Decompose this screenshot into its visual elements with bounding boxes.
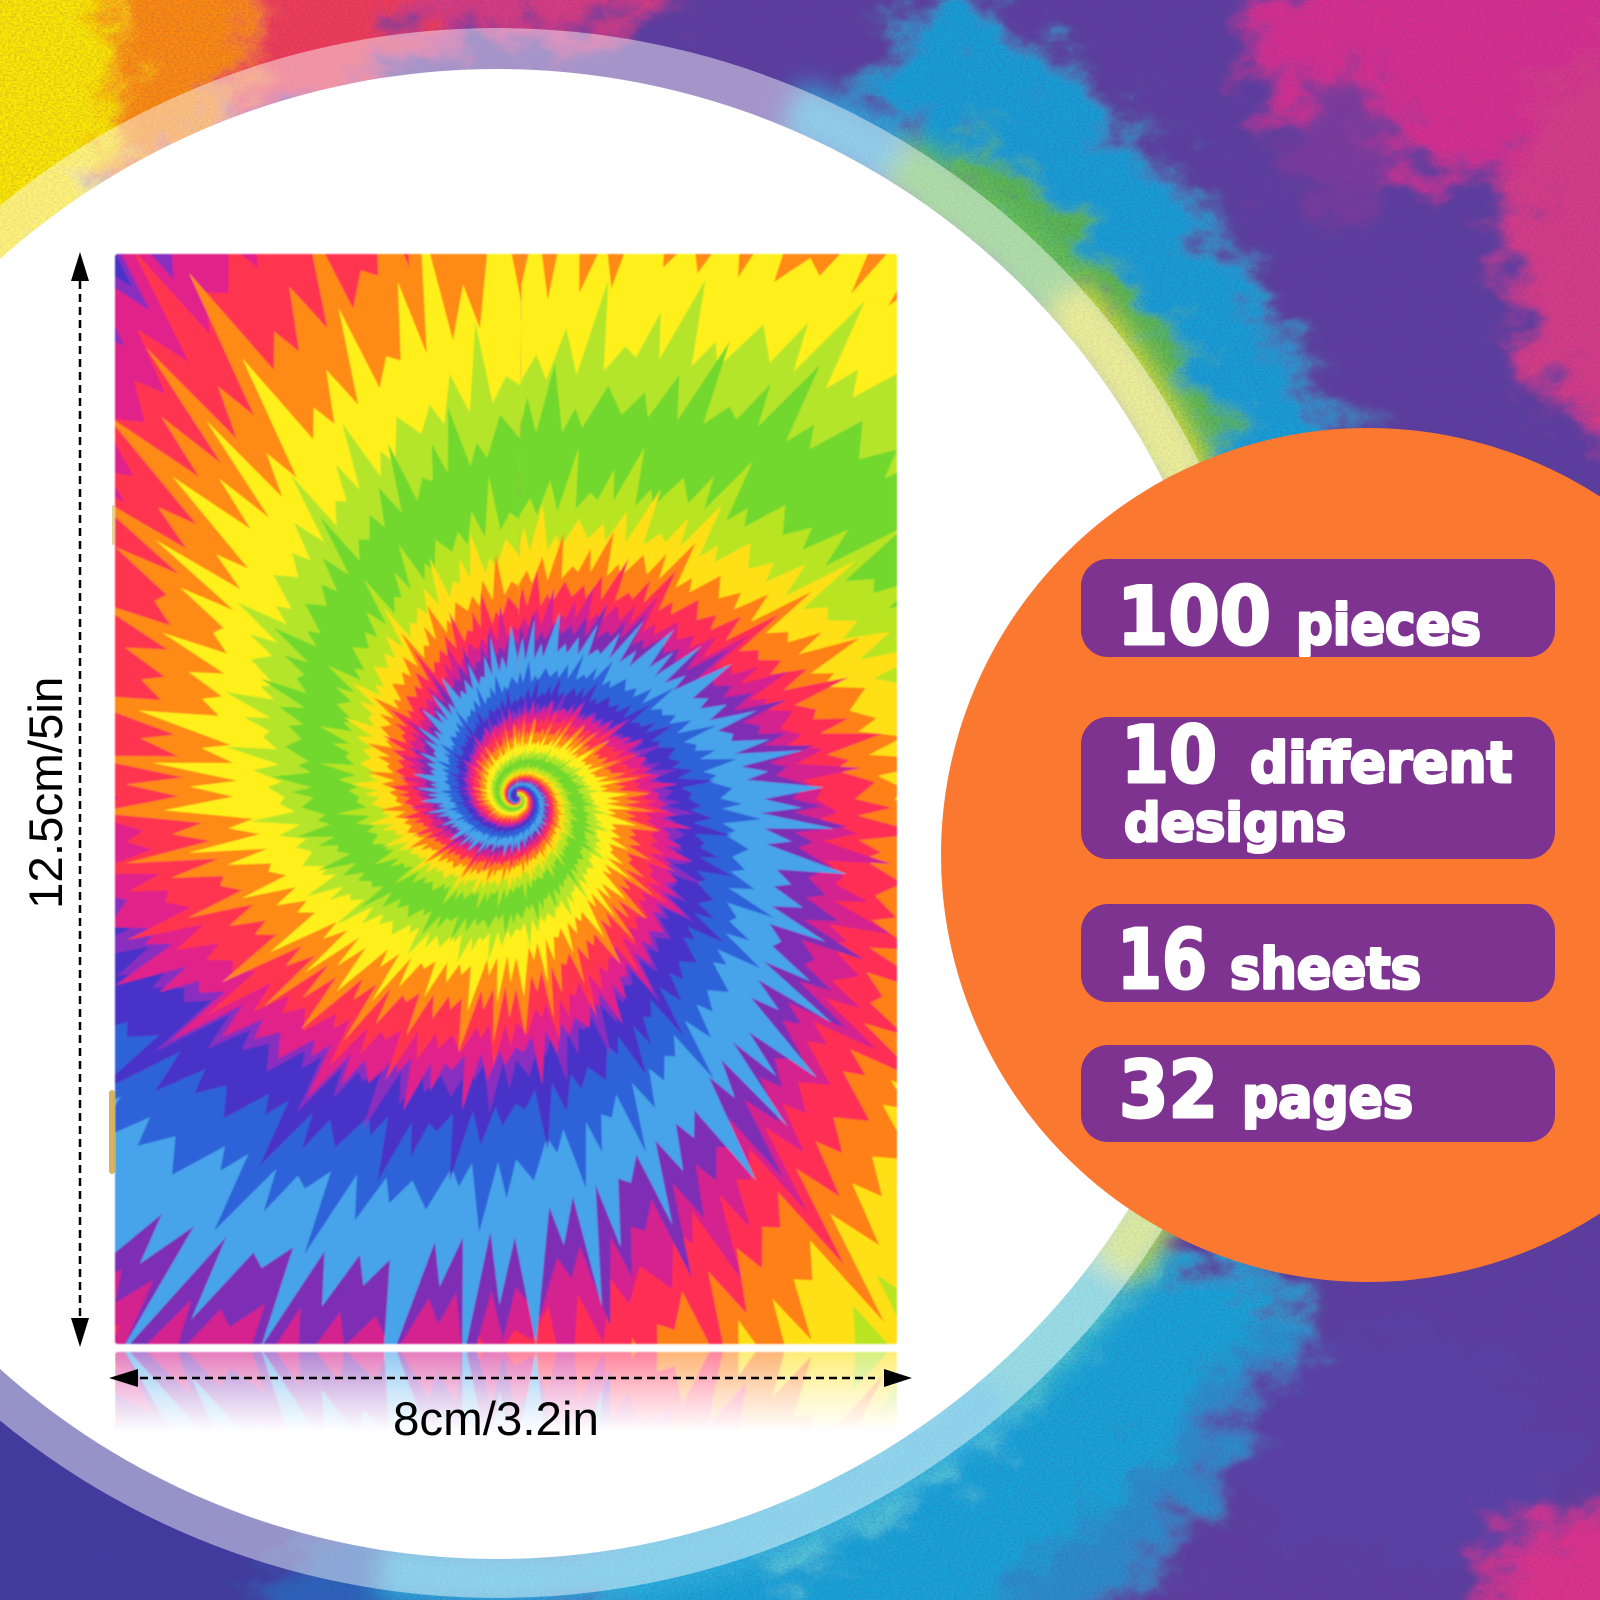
pill: 10 different designs: designs bbox=[1124, 793, 1346, 854]
pill: 10 different designs: 10 bbox=[1121, 711, 1217, 801]
pill: 32 pages: 32 bbox=[1119, 1046, 1218, 1136]
pill: 100 pieces bbox=[1081, 559, 1555, 663]
height dimension arrow bbox=[71, 252, 89, 1347]
pill: 32 pages: pages bbox=[1242, 1066, 1413, 1131]
pill: 10 different designs: different bbox=[1250, 731, 1512, 796]
pill: 16 sheets: sheets bbox=[1230, 937, 1421, 1002]
translucent white ring bbox=[0, 28, 1282, 1598]
pill: 100 pieces: 100 bbox=[1117, 570, 1271, 663]
pill: 10 different designs bbox=[1081, 711, 1555, 859]
pill: 32 pages bbox=[1081, 1045, 1555, 1142]
pill: 100 pieces: pieces bbox=[1296, 593, 1481, 658]
width dimension arrow bbox=[109, 1369, 912, 1387]
notebook reflection bbox=[115, 1351, 897, 1426]
pill: 16 sheets bbox=[1081, 904, 1555, 1008]
orange specification badge bbox=[941, 428, 1600, 1282]
height label: 12.5cm/5in bbox=[20, 677, 73, 909]
white circle panel bbox=[0, 69, 1242, 1559]
pill: 16 sheets: 16 bbox=[1117, 913, 1207, 1008]
width label: 8cm/3.2in bbox=[393, 1393, 599, 1446]
